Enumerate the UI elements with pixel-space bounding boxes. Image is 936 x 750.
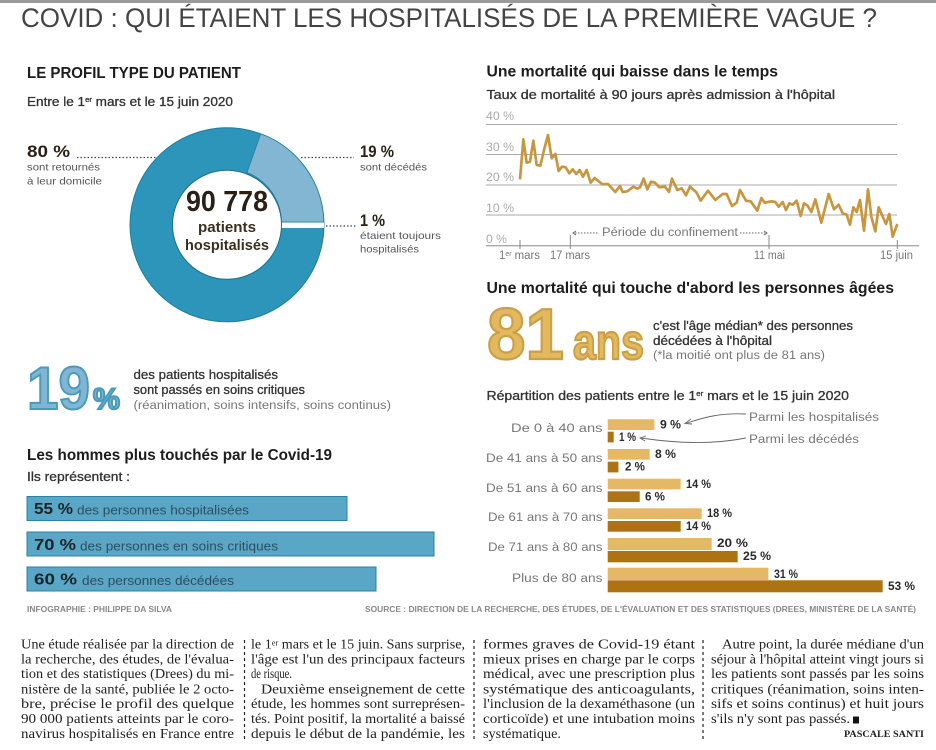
heading: distribution: mars et le 15 juin 2020	[703, 389, 849, 403]
column 2: er	[272, 638, 279, 648]
article text	[21, 636, 925, 741]
line chart: 0 %	[486, 234, 507, 246]
row: 51 to 60: 14 %	[686, 479, 711, 491]
critical care description: sont passés en soins critiques	[134, 383, 305, 397]
line chart: mars	[512, 250, 540, 262]
callout: 80 percent: 80 %	[27, 142, 70, 161]
line chart: 11 mai	[754, 250, 785, 262]
row: 51 to 60: De 51 ans à 60 ans	[486, 483, 603, 495]
column 2: tés. Point positif, la mortalité a baissé	[251, 711, 465, 726]
callout: 1 percent: 1 %	[360, 211, 385, 230]
heading: men: Les hommes plus touchés par le Covid-19	[27, 447, 332, 464]
donut centre total: hospitalisés	[185, 237, 269, 254]
row: 51 to 60: 6 %	[645, 492, 665, 504]
legend: among hospitalised: Parmi les hospitalisés	[749, 412, 879, 424]
panel: age distribution	[486, 389, 915, 593]
line chart: 20 %	[486, 172, 514, 184]
row: 71 to 80: 25 %	[743, 551, 771, 563]
subheading: dates: Entre le 1	[27, 95, 81, 109]
row: 61 to 70: 18 %	[707, 508, 732, 520]
row: over 80: 31 %	[774, 569, 798, 581]
column 3: systématique.	[483, 726, 561, 741]
column 1: tion et des statistiques (Drees) du mi-	[21, 666, 235, 681]
row: 71 to 80: 20 %	[717, 538, 748, 550]
line chart: er	[505, 251, 512, 258]
bar: 55 percent hospitalised	[27, 496, 347, 520]
bar: 70 percent critical care: 70 %	[34, 537, 76, 554]
column 4: Autre point, la durée médiane d'un	[722, 636, 924, 652]
row: 41 to 50	[486, 449, 676, 474]
heading: elderly: Une mortalité qui touche d'abord les personnes âgées	[486, 280, 894, 297]
big number: 81 years	[487, 295, 644, 375]
subheading: they represent: Ils représentent :	[27, 470, 130, 484]
donut centre total: patients	[198, 219, 256, 236]
legend: among hospitalised	[685, 412, 879, 424]
row: 0 to 40	[511, 419, 681, 444]
panel: elderly mortality	[486, 280, 894, 375]
heading: distribution: Répartition des patients entre le 1	[486, 389, 673, 403]
row: over 80	[512, 568, 915, 593]
row: 41 to 50: De 41 ans à 50 ans	[486, 453, 603, 465]
column 1: navirus hospitalisés en France entre	[21, 726, 234, 741]
credit: INFOGRAPHIE : PHILIPPE DA SILVA	[27, 605, 172, 614]
column 3: corticoïde) et une intubation moins	[483, 711, 695, 726]
big number: 19 percent: %	[93, 383, 120, 416]
column 2: étude, les hommes sont surreprésen-	[251, 696, 466, 711]
row: over 80: 53 %	[888, 581, 915, 593]
source: SOURCE : DIRECTION DE LA RECHERCHE, DES ÉTUDES, DE L'ÉVALUATION ET DES STATISTIQUES (DREES, MINISTÈRE DE LA SANTÉ)	[365, 605, 916, 614]
row: 0 to 40: 9 %	[660, 420, 681, 432]
column 4: PASCALE SANTI	[844, 730, 924, 740]
row: 0 to 40: 1 %	[619, 432, 636, 444]
donut centre total	[185, 186, 269, 254]
annotation: lockdown period arrow	[573, 227, 767, 239]
column 2: l'âge est l'un des principaux facteurs	[251, 652, 465, 666]
big number: 81 years: ans	[573, 314, 644, 370]
bar: 70 percent critical care	[27, 532, 434, 556]
bar: 60 percent deceased	[27, 567, 376, 591]
subheading: 90-day mortality rate: Taux de mortalité à 90 jours après admission à l'hôpital	[486, 88, 835, 102]
callout: 80 percent	[27, 142, 156, 188]
column 2: depuis le début de la pandémie, les	[251, 726, 465, 741]
bar: 55 percent hospitalised: 55 %	[34, 501, 73, 518]
critical care description	[134, 368, 391, 412]
column 1: 90 000 patients atteints par le coro-	[21, 711, 235, 726]
row: 71 to 80	[488, 538, 771, 563]
column 2: le 1	[251, 636, 271, 652]
column 4: les patients sont passés par les soins	[711, 666, 924, 681]
line chart: 30 %	[486, 142, 514, 154]
row: 61 to 70	[488, 508, 732, 533]
median age description: (*la moitié ont plus de 81 ans)	[653, 350, 825, 362]
column 4: séjour à l'hôpital atteint vingt jours si	[711, 652, 924, 666]
row: 61 to 70: De 61 ans à 70 ans	[488, 512, 603, 524]
bar: 70 percent critical care: des personnes en soins critiques	[80, 538, 279, 554]
bar: 55 percent hospitalised: des personnes hospitalisées	[77, 503, 250, 518]
line chart: 40 %	[486, 111, 514, 123]
callout: 19 percent: sont décédés	[360, 162, 427, 174]
line chart	[486, 111, 919, 262]
column 4: sifs et soins continus) et huit jours	[711, 696, 924, 711]
row: 51 to 60	[486, 479, 711, 504]
heading: patient profile: LE PROFIL TYPE DU PATIENT	[27, 65, 241, 82]
title: COVID : QUI ÉTAIENT LES HOSPITALISÉS DE LA PREMIÈRE VAGUE ?	[21, 3, 877, 33]
column 1: la recherche, des études, de l'évalua-	[21, 652, 235, 666]
panel: mortality over time	[486, 64, 919, 262]
column 4: critiques (réanimation, soins inten-	[711, 682, 925, 696]
line chart: 17 mars	[550, 250, 590, 262]
heading: distribution: er	[696, 391, 704, 398]
heading: mortality falling: Une mortalité qui baisse dans le temps	[486, 64, 778, 81]
line chart: 10 %	[486, 203, 514, 215]
column 3: formes graves de Covid-19 étant	[483, 636, 695, 652]
line chart: 1	[499, 250, 505, 262]
column 2	[251, 636, 466, 741]
line chart: 15 juin	[880, 250, 913, 262]
callout: 1 percent: hospitalisés	[360, 244, 419, 256]
column 1	[21, 636, 235, 741]
row: 71 to 80: De 71 ans à 80 ans	[488, 542, 603, 554]
median age description: c'est l'âge médian* des personnes	[653, 319, 853, 333]
critical care description: (réanimation, soins intensifs, soins continus)	[134, 400, 391, 412]
annotation: lockdown period arrow: Période du confinement	[602, 227, 739, 239]
callout: 19 percent	[301, 142, 427, 174]
column 2: mars et le 15 juin. Sans surprise,	[278, 636, 465, 652]
bar: 60 percent deceased: 60 %	[34, 572, 77, 588]
critical care description: des patients hospitalisés	[134, 368, 278, 382]
column 3	[483, 636, 695, 741]
row: over 80: Plus de 80 ans	[512, 573, 603, 585]
big number: 19 percent: 19	[27, 355, 90, 422]
row: 0 to 40: De 0 à 40 ans	[511, 423, 603, 435]
column 2: Deuxième enseignement de cette	[261, 682, 465, 696]
column 3: l'inclusion de la dexaméthasone (un	[483, 696, 695, 711]
subheading: dates: er	[85, 97, 93, 104]
column 4	[711, 636, 925, 740]
subheading: dates: mars et le 15 juin 2020	[92, 95, 233, 109]
column 3: systématique des anticoagulants,	[483, 682, 695, 696]
panel: men more affected	[27, 447, 434, 591]
column 1: bre, précise le profil des quelque	[21, 696, 234, 711]
bar: 60 percent deceased: des personnes décédées	[82, 573, 235, 588]
column 2: de risque.	[251, 666, 292, 681]
row: 41 to 50: 8 %	[655, 449, 676, 461]
donut chart	[130, 128, 324, 322]
row: 61 to 70: 14 %	[686, 521, 711, 533]
median age description	[653, 319, 853, 362]
callout: 80 percent: à leur domicile	[27, 176, 102, 188]
row: 41 to 50: 2 %	[625, 462, 645, 474]
callout: 1 percent	[326, 211, 441, 256]
callout: 80 percent: sont retournés	[27, 162, 100, 174]
big number: 81 years: 81	[487, 295, 564, 375]
callout: 1 percent: étaient toujours	[360, 230, 441, 242]
callout: 19 percent: 19 %	[360, 142, 394, 161]
column 3: médical, avec une prescription plus	[483, 666, 695, 681]
legend: among deceased	[640, 434, 859, 446]
donut centre total: 90 778	[186, 186, 268, 218]
panel: critical care statistic	[27, 355, 391, 422]
column 4: s'ils n'y sont pas passés.	[711, 711, 850, 726]
legend: among deceased: Parmi les décédés	[749, 434, 859, 446]
panel: patient profile	[27, 65, 441, 322]
bar chart	[486, 419, 915, 593]
column 1: nistère de la santé, publiée le 2 octo-	[21, 682, 235, 696]
median age description: décédées à l'hôpital	[653, 334, 772, 348]
column 1: Une étude réalisée par la direction de	[21, 636, 234, 652]
column 3: mieux prises en charge par le corps	[483, 652, 695, 666]
